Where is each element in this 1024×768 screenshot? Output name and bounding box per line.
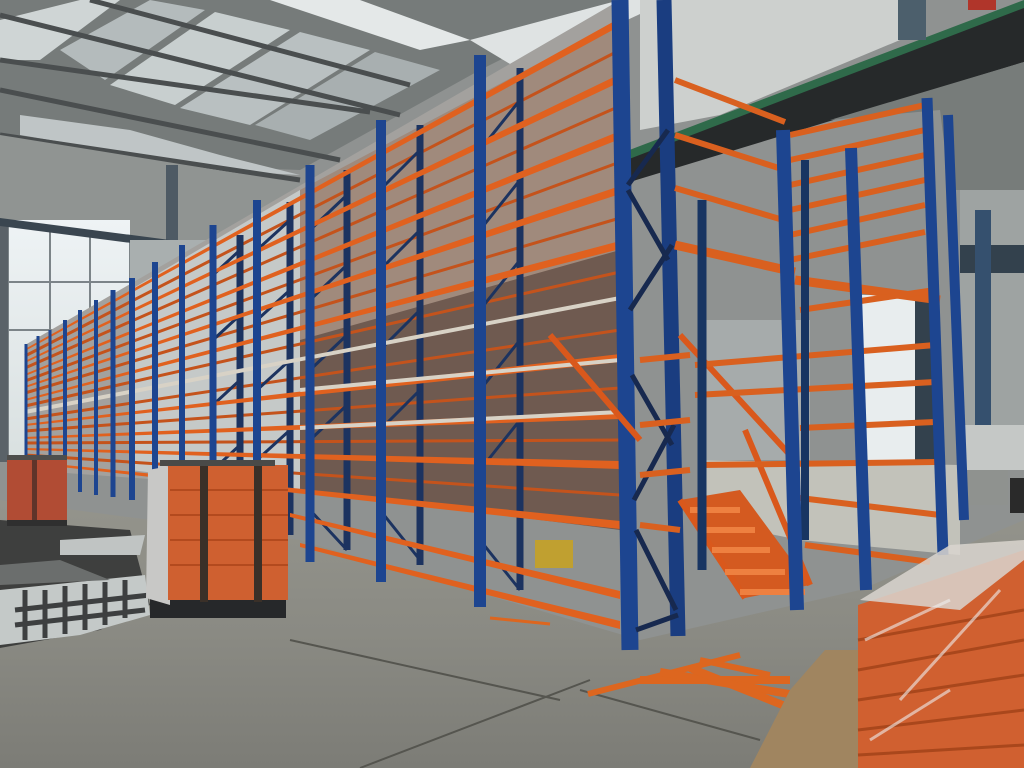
back wall xyxy=(0,135,310,245)
floor xyxy=(0,500,1024,768)
far window right of stairs xyxy=(700,295,960,555)
wrapped stack of orange panels, bottom right xyxy=(858,540,1024,768)
dark steel girder with green trim xyxy=(590,0,1024,185)
main rack: depth beams xyxy=(25,50,620,495)
loose orange beams on floor xyxy=(490,618,795,708)
interior seen through racks xyxy=(25,0,620,530)
yellow bag under rack xyxy=(535,540,573,568)
right rack: blue uprights xyxy=(702,98,964,610)
pallet of shelf panels, centre left xyxy=(146,460,288,618)
main rack: blue front uprights receding xyxy=(26,55,480,607)
machinery at right xyxy=(965,425,1024,513)
wet puddle with reflections xyxy=(0,520,150,648)
main rack: tapered orange beams, front row xyxy=(25,18,620,629)
sack in foreground xyxy=(750,650,862,768)
ceiling: right bright section xyxy=(640,0,900,130)
right side ceiling and wall xyxy=(830,62,1024,430)
ceiling: left skylight section xyxy=(0,0,670,180)
main rack: front frame xyxy=(620,0,678,650)
main rack: dark blue back uprights and bracing xyxy=(213,68,520,590)
large window at far end xyxy=(0,218,230,470)
pallet at far left xyxy=(7,455,67,526)
stairs xyxy=(550,335,810,598)
main rack: pale reflective beams xyxy=(25,298,620,428)
right rack: orange beams xyxy=(640,80,940,562)
